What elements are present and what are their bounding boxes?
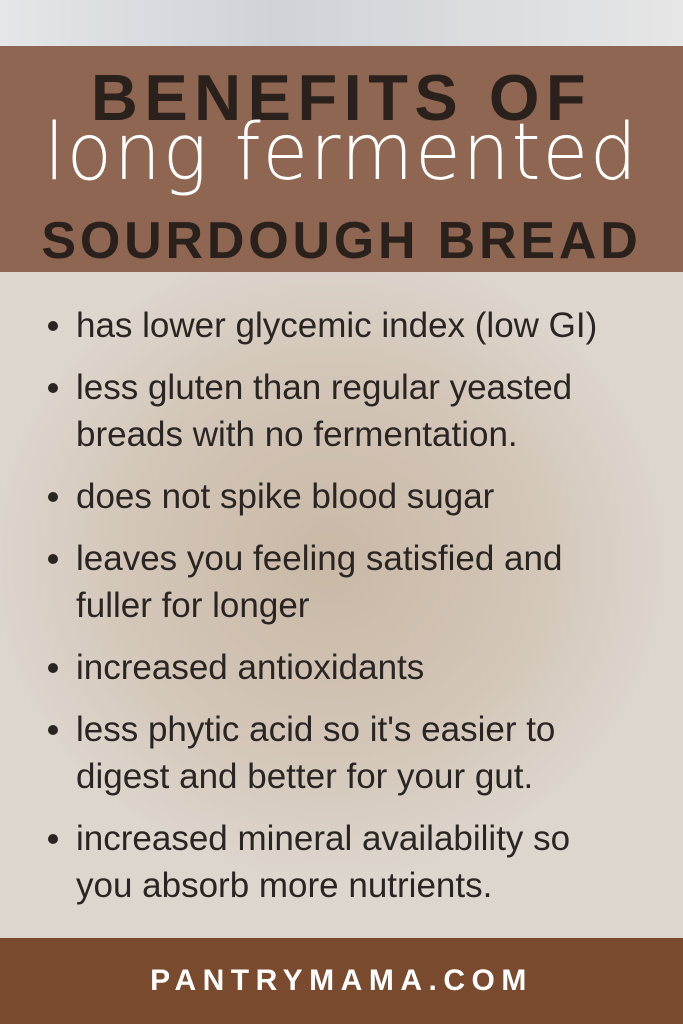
title script: long fermented: long fermented xyxy=(44,108,639,198)
footer xyxy=(0,938,683,1024)
title band xyxy=(0,46,683,272)
benefits list: does not spike blood sugar xyxy=(76,477,494,516)
title: sourdough bread: SOURDOUGH BREAD xyxy=(41,212,642,270)
benefits list xyxy=(48,306,597,905)
benefits list: less gluten than regular yeasted breads with no fermentation. xyxy=(76,368,572,454)
benefits list: leaves you feeling satisfied and fuller for longer xyxy=(76,539,562,625)
benefits list: less phytic acid so it's easier to digest and better for your gut. xyxy=(76,710,555,796)
footer: PANTRYMAMA.COM xyxy=(150,964,533,997)
title: benefits of: BENEFITS OF xyxy=(91,61,592,134)
benefits list: has lower glycemic index (low GI) xyxy=(76,306,597,345)
benefits list: increased mineral availability so you absorb more nutrients. xyxy=(76,819,570,905)
benefits list: increased antioxidants xyxy=(76,648,424,687)
